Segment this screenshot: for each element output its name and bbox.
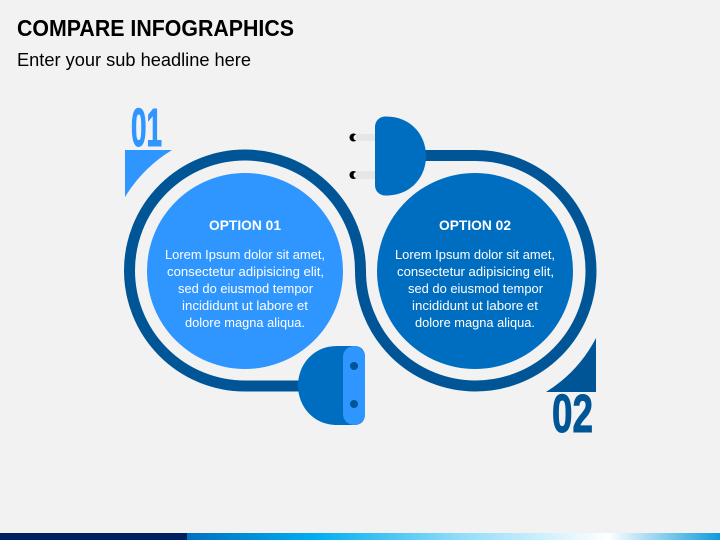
footer gradient bar <box>0 533 720 540</box>
text block: option 02: dolore magna aliqua. <box>415 315 535 330</box>
number 01: 01 <box>131 98 162 158</box>
text block: option 02 <box>395 247 555 330</box>
text block: option 02: consectetur adipisicing elit, <box>397 264 554 279</box>
heading: option 02: OPTION 02 <box>439 217 511 233</box>
text block: option 02: sed do eiusmod tempor <box>408 281 544 296</box>
text block: option 02: Lorem Ipsum dolor sit amet, <box>395 247 555 262</box>
connecting cable <box>130 155 591 386</box>
heading: option 01: OPTION 01 <box>209 217 281 233</box>
text block: option 01: incididunt ut labore et <box>182 298 308 313</box>
number 02: 02 <box>552 384 593 444</box>
icon: top plug <box>350 116 426 196</box>
title: COMPARE INFOGRAPHICS <box>17 15 294 41</box>
text block: option 01: consectetur adipisicing elit, <box>167 264 324 279</box>
text block: option 01: Lorem Ipsum dolor sit amet, <box>165 247 325 262</box>
text block: option 01: sed do eiusmod tempor <box>178 281 314 296</box>
text block: option 01 <box>165 247 325 330</box>
icon: bottom plug <box>298 346 365 425</box>
panel: option 02 <box>377 173 573 369</box>
corner triangle 2 <box>546 338 596 392</box>
corner triangle 1 <box>125 150 172 197</box>
panel: option 01 <box>147 173 343 369</box>
subtitle: Enter your sub headline here <box>17 50 251 70</box>
text block: option 02: incididunt ut labore et <box>412 298 538 313</box>
text block: option 01: dolore magna aliqua. <box>185 315 305 330</box>
